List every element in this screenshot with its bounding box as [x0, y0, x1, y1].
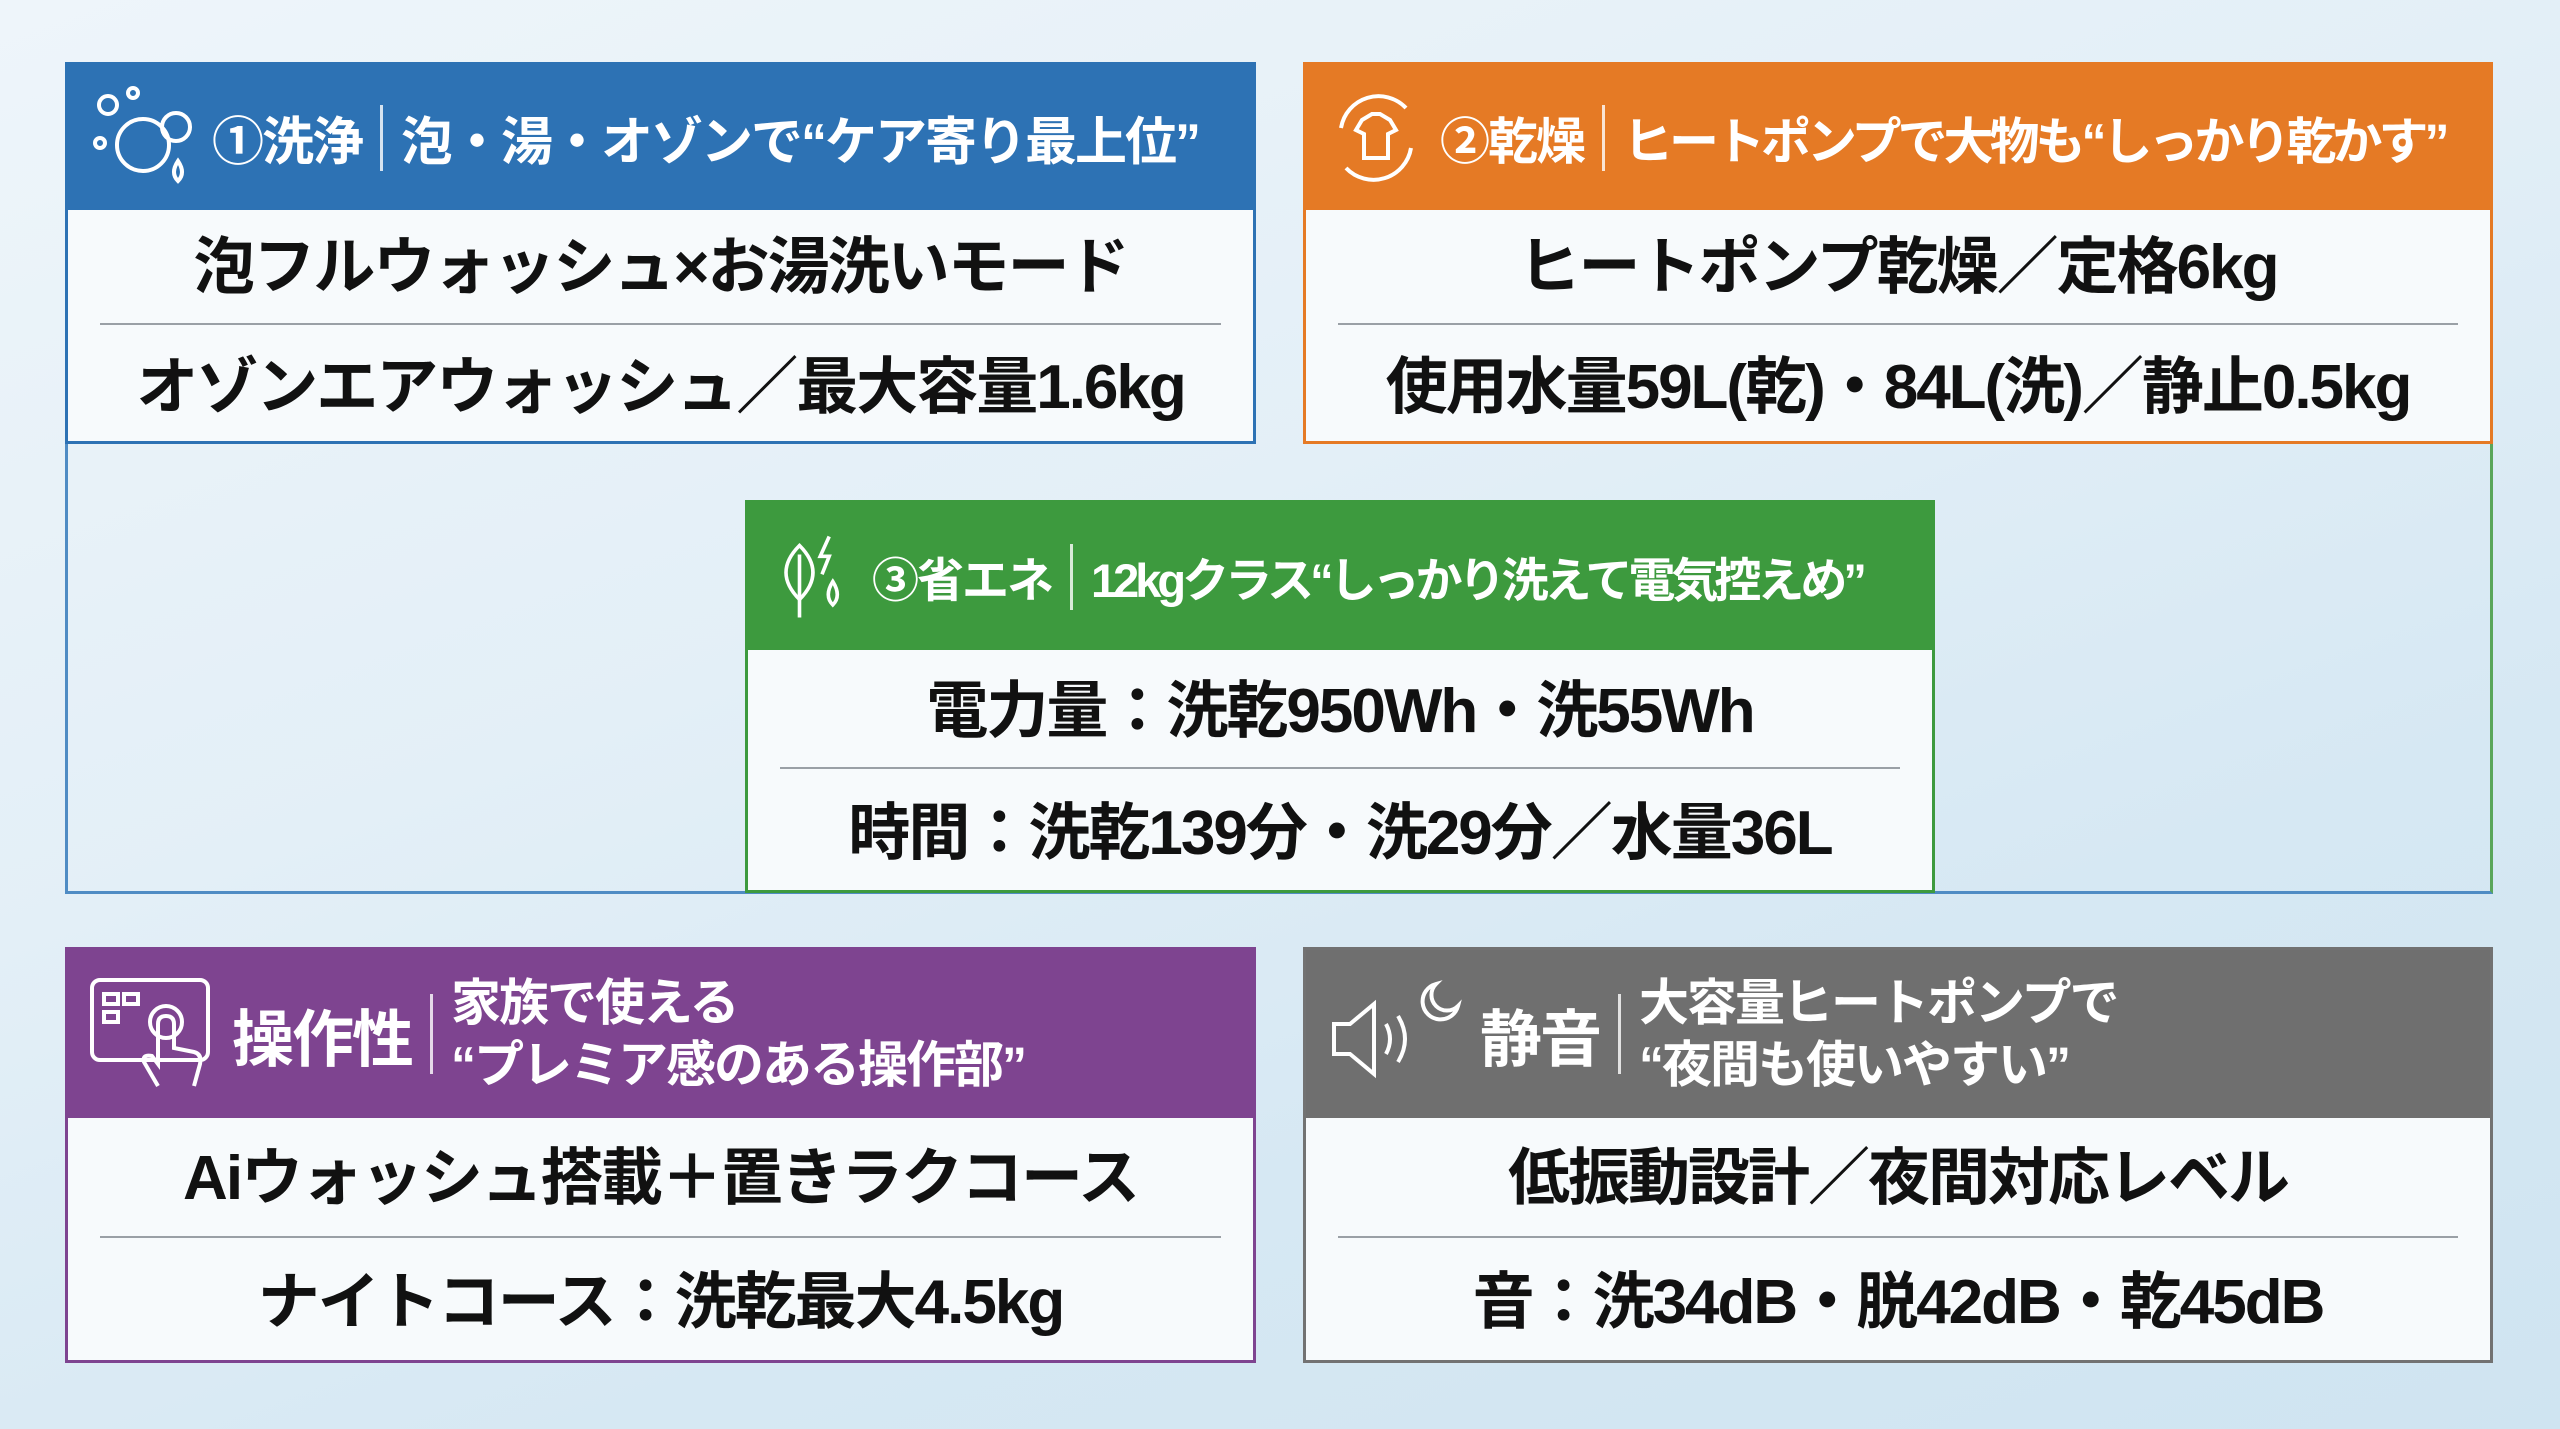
text: line 2: ナイトコース：洗乾最大4.5kg [258, 1268, 1063, 1337]
header: washing: ①洗浄 [212, 114, 362, 172]
header: energy: 12kgクラス“しっかり洗えて電気控えめ” [1091, 554, 1863, 607]
icon: shirt cycle [1339, 94, 1413, 182]
header: energy [748, 503, 1932, 650]
text: line 1: 低振動設計／夜間対応レベル [1508, 1144, 2288, 1213]
header: operability [68, 950, 1253, 1118]
panel: quietness [1303, 947, 2493, 1363]
text: line 1: 泡フルウォッシュ×お湯洗いモード [193, 233, 1128, 302]
text: line 1: ヒートポンプ乾燥／定格6kg [1518, 233, 2277, 302]
header: operability: “プレミア感のある操作部” [451, 1037, 1025, 1093]
header: drying: ヒートポンプで大物も“しっかり乾かす” [1623, 114, 2446, 170]
frame: background outline [65, 300, 2493, 894]
header: washing: 泡・湯・オゾンで“ケア寄り最上位” [401, 114, 1199, 172]
text: line 2: 音：洗34dB・脱42dB・乾45dB [1473, 1268, 2323, 1337]
panel: energy [745, 500, 1935, 893]
header: drying: ②乾燥 [1440, 114, 1584, 170]
text: line 1: Aiウォッシュ搭載＋置きラクコース [183, 1144, 1138, 1213]
header: energy: ③省エネ [872, 554, 1052, 607]
header: drying [1306, 65, 2490, 210]
panel: washing [65, 62, 1256, 444]
header: washing [68, 65, 1253, 210]
header: quietness: “夜間も使いやすい” [1639, 1037, 2069, 1093]
panel: operability [65, 947, 1256, 1363]
text: line 2: 時間：洗乾139分・洗29分／水量36L [848, 799, 1832, 868]
header: quietness: 静音 [1480, 1006, 1600, 1075]
header: operability: 家族で使える [451, 974, 738, 1030]
header: quietness: 大容量ヒートポンプで [1639, 974, 2118, 1030]
icon: leaf bolt [784, 536, 840, 618]
icon: touch panel [90, 978, 210, 1087]
text: line 2: オゾンエアウォッシュ／最大容量1.6kg [136, 353, 1185, 422]
panel: drying [1303, 62, 2493, 444]
header: quietness [1306, 950, 2490, 1118]
icon: speaker moon [1332, 980, 1462, 1078]
header: operability: 操作性 [232, 1006, 412, 1075]
text: line 1: 電力量：洗乾950Wh・洗55Wh [926, 677, 1754, 746]
text: line 2: 使用水量59L(乾)・84L(洗)／静止0.5kg [1386, 353, 2410, 422]
icon: bubbles [93, 86, 192, 184]
